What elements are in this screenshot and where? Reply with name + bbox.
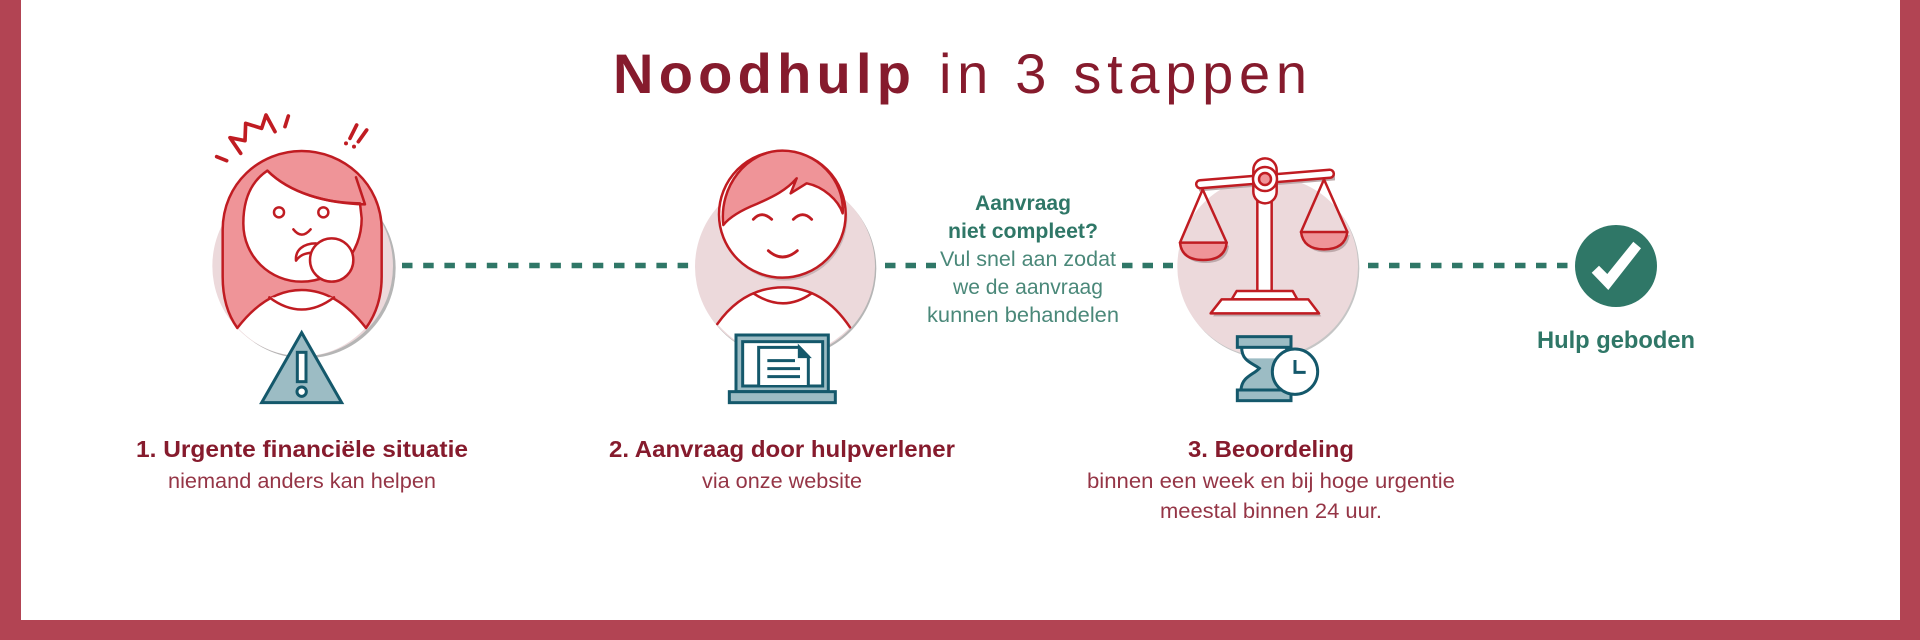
title <box>613 42 1307 105</box>
text: step 2: via onze website <box>702 470 862 493</box>
dashed connector line: step 1 to step 2 <box>402 263 690 268</box>
icon: worried woman with warning sign <box>212 115 396 403</box>
callout: incomplete application: we de aanvraag <box>952 276 1103 299</box>
icon: smiling helper with laptop <box>695 151 876 403</box>
callout: incomplete application: Vul snel aan zodat <box>940 248 1116 271</box>
dashed connector line: step 3 to help given <box>1368 263 1568 268</box>
callout: incomplete application: kunnen behandelen <box>927 304 1119 327</box>
callout: incomplete application <box>927 192 1119 327</box>
title: Noodhulp <box>613 42 911 105</box>
text: step 1: 1. Urgente financiële situatie <box>136 436 468 462</box>
icon: balance scale with hourglass <box>1177 158 1359 401</box>
title: in 3 stappen <box>939 42 1307 105</box>
callout: incomplete application: niet compleet? <box>948 220 1098 243</box>
dashed connector line: step 2 to incomplete note <box>885 263 936 268</box>
text: step 2: 2. Aanvraag door hulpverlener <box>609 436 955 462</box>
label: help given: Hulp geboden <box>1537 327 1695 354</box>
callout: incomplete application: Aanvraag <box>975 192 1071 215</box>
text: step 1: niemand anders kan helpen <box>168 470 436 493</box>
text: step 1 <box>136 436 468 493</box>
text: step 3 <box>1087 436 1455 523</box>
dashed connector line: incomplete note to step 3 <box>1122 263 1173 268</box>
icon: green check mark <box>1575 225 1657 307</box>
text: step 3: 3. Beoordeling <box>1188 436 1354 462</box>
text: step 3: meestal binnen 24 uur. <box>1160 500 1382 523</box>
text: step 3: binnen een week en bij hoge urgentie <box>1087 470 1455 493</box>
text: step 2 <box>609 436 955 493</box>
